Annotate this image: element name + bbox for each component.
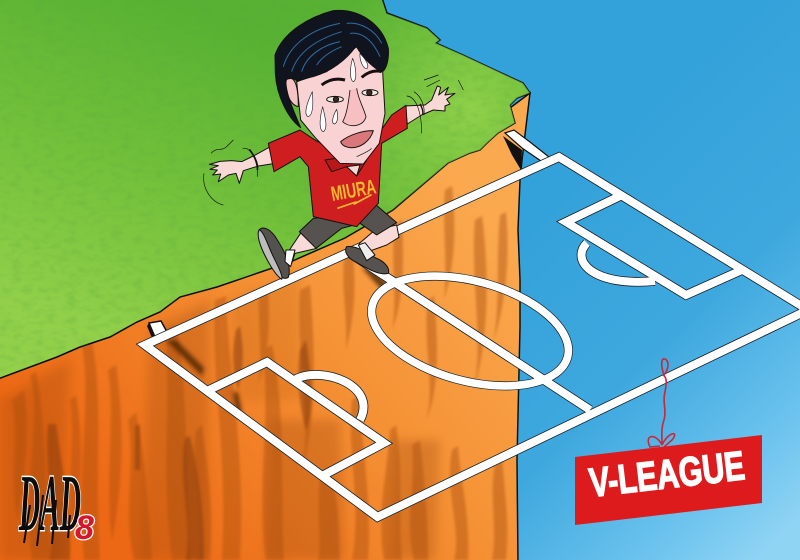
panel: orange cliff face bbox=[0, 93, 530, 560]
lips bbox=[341, 131, 373, 148]
artist signature bbox=[19, 460, 94, 548]
sweat drops bbox=[306, 53, 368, 132]
MIURA shirt text: MIURA bbox=[329, 175, 378, 206]
left corner post stub bbox=[147, 321, 167, 338]
footballer caricature bbox=[204, 10, 463, 279]
red shirt bbox=[268, 105, 407, 227]
hair bbox=[275, 10, 388, 128]
left leg bbox=[285, 232, 317, 263]
line shadows on cliff bbox=[166, 268, 388, 412]
collar bbox=[325, 157, 367, 176]
shorts bbox=[299, 204, 397, 248]
left arm and hand bbox=[209, 146, 275, 183]
chin line bbox=[357, 148, 372, 157]
V-League sign bbox=[575, 435, 762, 525]
nose bbox=[343, 88, 366, 126]
ear bbox=[286, 78, 298, 107]
left boot bbox=[258, 228, 289, 279]
artist signature: 8 bbox=[75, 509, 94, 547]
V-League sign: V-LEAGUE bbox=[587, 442, 747, 506]
right boot bbox=[346, 246, 389, 274]
grass cliff top bbox=[0, 0, 540, 380]
sock bbox=[358, 243, 375, 261]
neck opening bbox=[347, 165, 360, 176]
eyebrows bbox=[322, 71, 382, 85]
eyes bbox=[327, 90, 378, 102]
left sock bbox=[285, 250, 295, 267]
right arm and hand bbox=[405, 86, 455, 124]
face bbox=[297, 47, 385, 164]
shirt lightning stripe bbox=[337, 195, 372, 208]
right corner post stub bbox=[503, 130, 549, 170]
motion lines bbox=[204, 75, 463, 205]
cartoon illustration: DAD bbox=[19, 460, 81, 548]
red string with heart knot bbox=[648, 359, 675, 447]
right leg bbox=[359, 225, 399, 253]
soccer field markings bbox=[145, 157, 800, 517]
